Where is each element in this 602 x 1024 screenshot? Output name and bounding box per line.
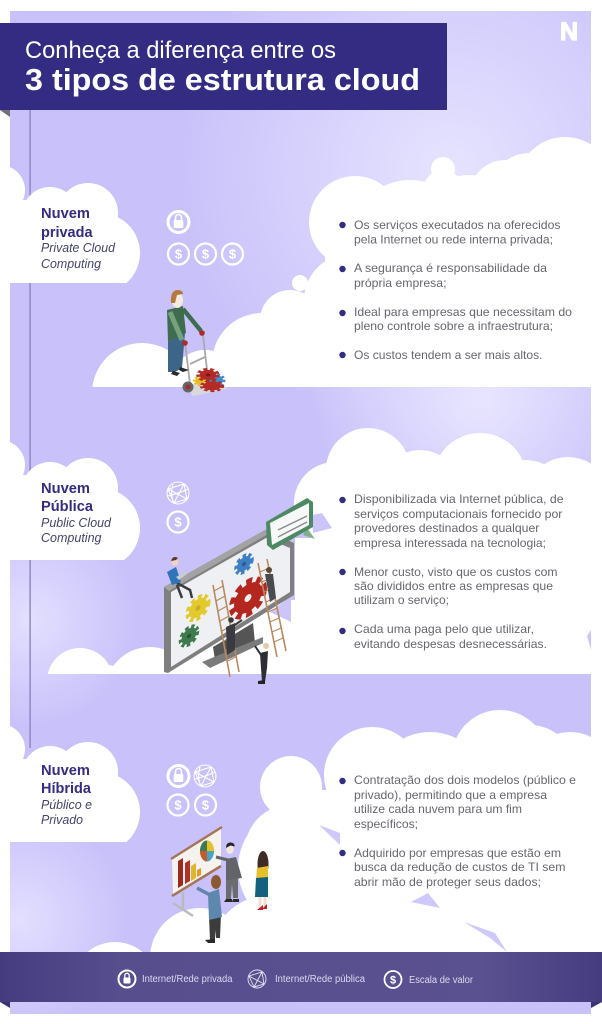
bullet list: private: A segurança é responsabilidade da [354, 261, 547, 275]
illustration: man with hand cart [167, 290, 228, 396]
bullet list: public: Cada uma paga pelo que utilizar, [354, 622, 534, 636]
heading: nuvem hibrida [41, 762, 92, 827]
bullet list: private: Os custos tendem a ser mais altos. [354, 348, 542, 362]
bullet list: hybrid: Adquirido por empresas que estão em [354, 846, 561, 860]
bullet list: public: provedores destinados a qualquer [354, 521, 539, 535]
bullet list: hybrid: Contratação dos dois modelos (público e [354, 773, 576, 787]
bullet list: hybrid [339, 773, 576, 889]
icon: dollar rating: $ [202, 246, 210, 262]
bullet list: private: Os serviços executados na oferecidos [354, 218, 561, 232]
cloud: hybrid left label [10, 726, 140, 842]
purple wedges in public cloud [270, 513, 591, 650]
illustration: monitor with gears and people [164, 498, 315, 684]
bullet list: hybrid: abrir mão de proteger seus dados; [354, 875, 541, 889]
icon: dollar rating: $ [229, 246, 237, 262]
bullet list: hybrid: busca da redução de custos de TI sem [354, 860, 566, 874]
bullet list: public: utilizam o serviço; [354, 593, 449, 607]
bullet list: private: própria empresa; [354, 276, 446, 290]
heading: nuvem hibrida: Híbrida [41, 780, 92, 797]
person: blue jacket man [197, 875, 222, 943]
title banner [0, 23, 447, 117]
bullet list: hybrid: privado), permitindo que a empresa [354, 788, 547, 802]
person: suit man [216, 842, 242, 902]
title line 1: Conheça a diferença entre os [25, 37, 336, 64]
bullet list: public: empresa interessada na tecnologia; [354, 536, 546, 550]
legend: public [248, 970, 365, 988]
heading: nuvem publica [41, 480, 112, 545]
icon: lock [168, 212, 189, 232]
legend: private [118, 970, 233, 988]
bullet list: private: pleno controle sobre a infraestrutura; [354, 319, 553, 333]
icon: lock [168, 766, 189, 786]
bullet list: hybrid: utilize cada nuvem para um fim [354, 802, 522, 816]
panel: nuvem hibrida [10, 710, 591, 952]
heading: nuvem privada: Private Cloud [41, 241, 116, 255]
heading: nuvem privada: Nuvem [41, 205, 90, 222]
heading: nuvem hibrida: Público e [41, 798, 92, 812]
footer legend bar [0, 952, 602, 1008]
heading: nuvem publica: Computing [41, 531, 102, 545]
cloud: public right [48, 428, 591, 674]
heading: nuvem privada [41, 205, 116, 271]
person: woman [255, 851, 268, 910]
cloud: public left label [10, 442, 140, 560]
icon: dollar rating [168, 244, 243, 264]
legend: private: Internet/Rede privada [142, 974, 233, 985]
bullet list: public: serviços computacionais fornecido por [354, 507, 562, 521]
panel: nuvem publica [10, 428, 591, 684]
icon: globe [194, 765, 216, 787]
heading: nuvem publica: Pública [41, 498, 94, 515]
bullet list: private [339, 218, 572, 362]
purple wedges in cloud [319, 825, 507, 952]
person: bottom with arm up [255, 643, 269, 684]
bullet list: public: Menor custo, visto que os custos com [354, 565, 558, 579]
icon: globe [167, 482, 189, 504]
heading: nuvem hibrida: Privado [41, 813, 83, 827]
cloud: private left label [10, 167, 140, 283]
bullet list: hybrid: específicos; [354, 817, 418, 831]
person: centre [226, 617, 242, 655]
icon: dollar rating: $ [174, 798, 182, 812]
icon: dollar rating: $ [174, 514, 182, 530]
heading: nuvem privada: Computing [41, 257, 101, 271]
bullet list: private: pela Internet ou rede interna privada; [354, 232, 553, 246]
bullet list: public [339, 492, 564, 651]
ladder: left [213, 580, 239, 677]
heading: nuvem hibrida: Nuvem [41, 762, 90, 779]
cloud: private right [92, 137, 591, 387]
panel: nuvem privada [10, 137, 591, 396]
legend: public: Internet/Rede pública [275, 974, 365, 985]
speech bubble [266, 498, 315, 550]
logo: N [560, 18, 578, 46]
bullet list: public: evitando despesas desnecessárias. [354, 637, 547, 651]
heading: nuvem publica: Nuvem [41, 480, 90, 497]
icon: dollar rating: $ [175, 246, 183, 262]
person: on right ladder [265, 567, 276, 602]
icon: dollar rating [168, 512, 188, 532]
bullet list: private: Ideal para empresas que necessitam do [354, 305, 572, 319]
heading: nuvem privada: privada [41, 224, 93, 241]
gear: blue [236, 552, 252, 576]
icon: dollar rating: $ [202, 798, 210, 812]
timeline vertical line [29, 110, 31, 748]
legend: value scale: $ [390, 974, 396, 986]
bullet list: public: são divididos entre as empresas que [354, 579, 553, 593]
person: sitting with laptop [167, 557, 192, 598]
cloud: hybrid right [88, 710, 591, 952]
legend: value scale: Escala de valor [409, 975, 474, 986]
legend: value scale [384, 971, 474, 988]
ladder: right [258, 559, 286, 657]
gear: red [232, 573, 264, 623]
heading: nuvem publica: Public Cloud [41, 516, 112, 530]
gear: green [180, 623, 198, 649]
title line 2: 3 tipos de estrutura cloud [25, 62, 420, 97]
bullet list: public: Disponibilizada via Internet pública, de [354, 492, 564, 506]
icon: dollar rating [168, 794, 216, 816]
illustration: presentation board and people [171, 827, 268, 943]
gear: yellow [188, 592, 208, 624]
